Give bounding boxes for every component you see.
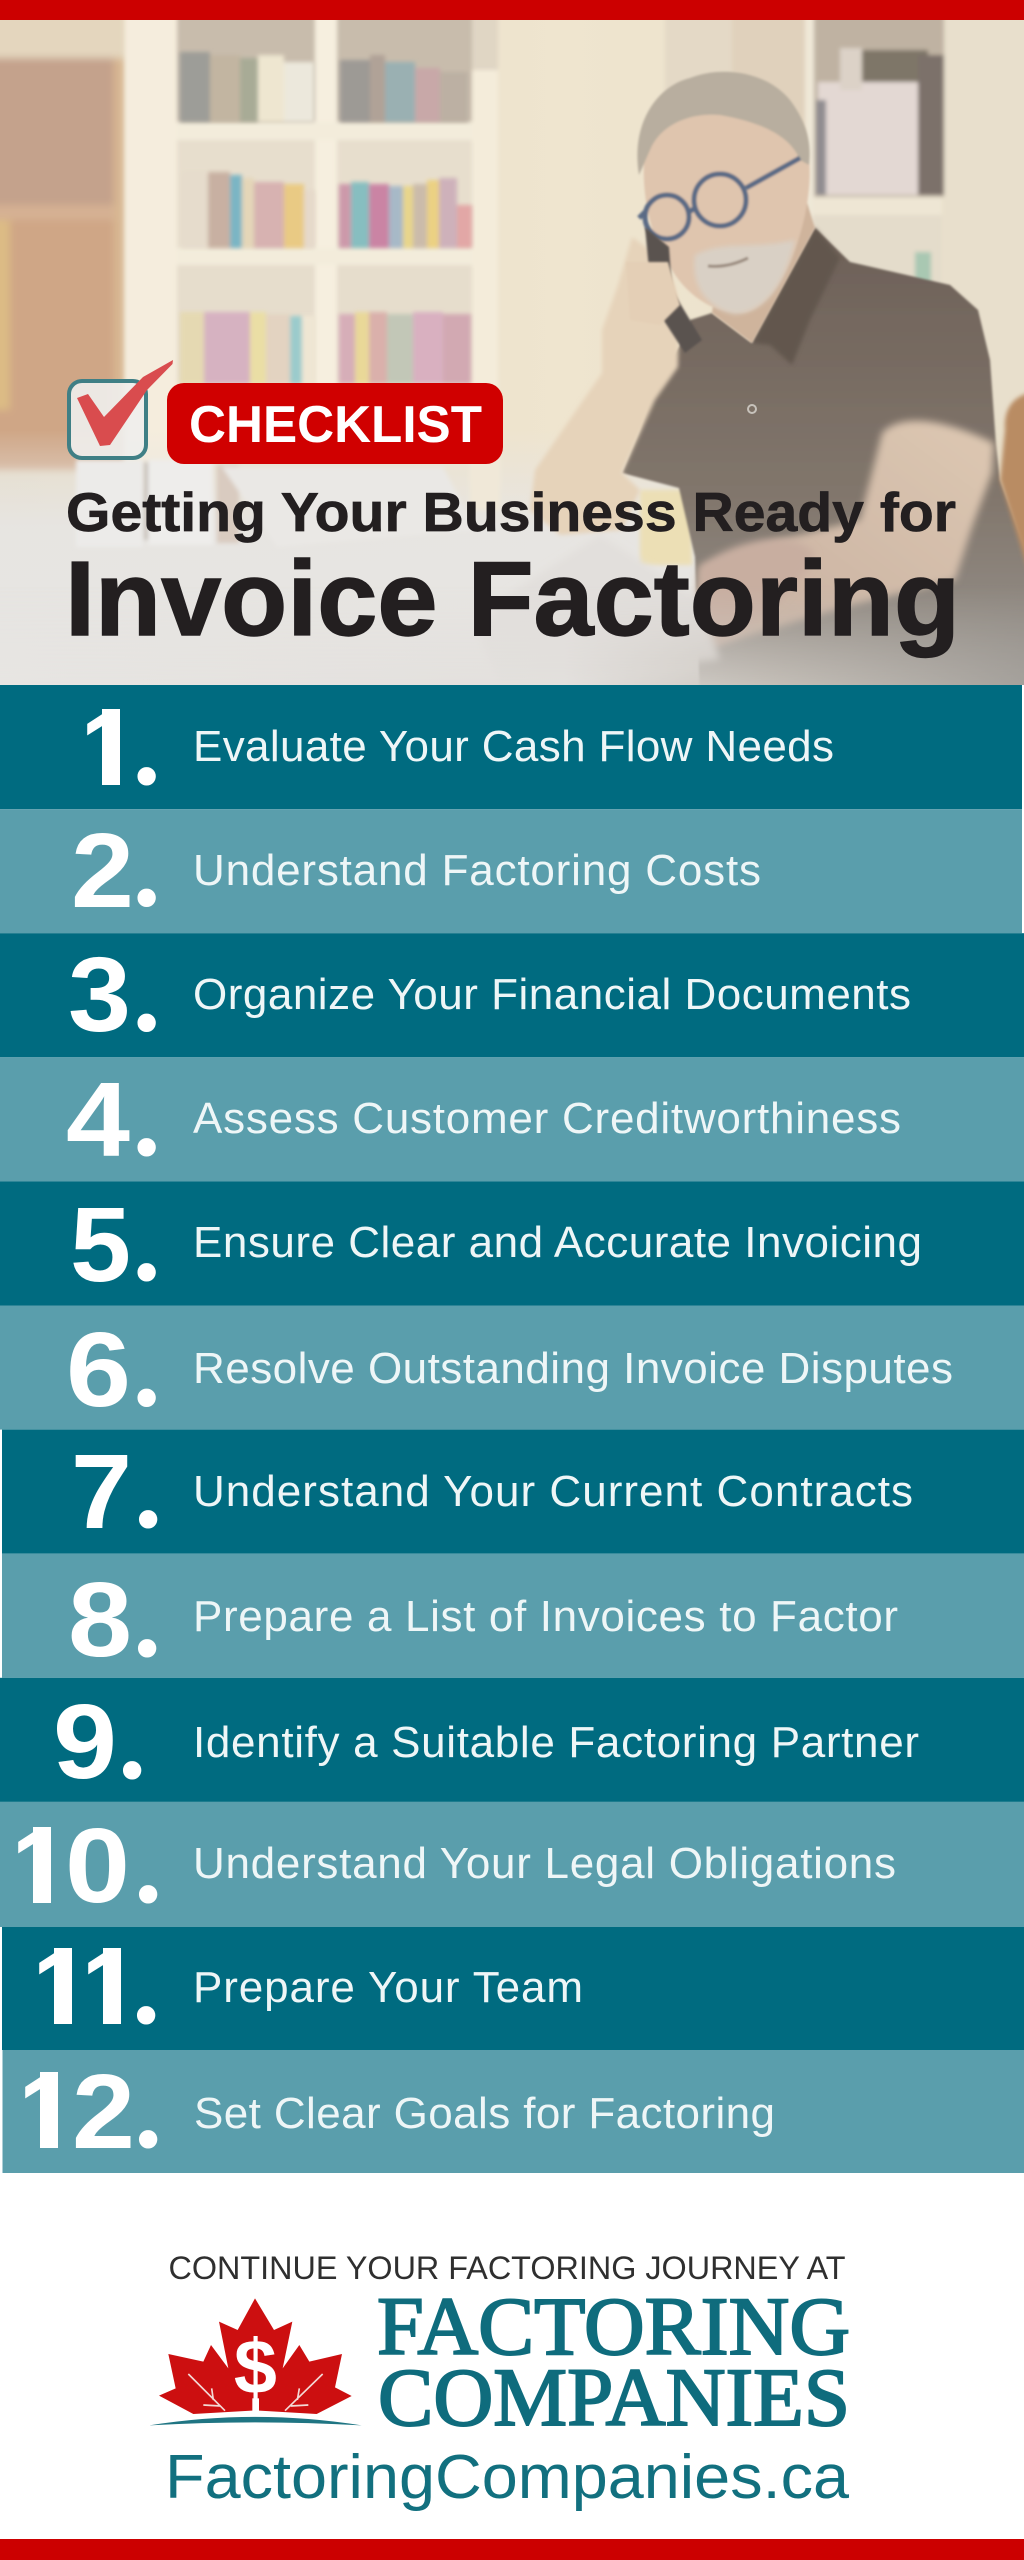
website url: FactoringCompanies.ca [165, 2443, 850, 2512]
row 4: 4 [66, 1061, 130, 1179]
logo wordmark: COMPANIES [378, 2351, 850, 2443]
row 11 [2, 1923, 1024, 2050]
row 7: Understand Your Current Contracts [193, 1467, 913, 1516]
call to action text: CONTINUE YOUR FACTORING JOURNEY AT [168, 2250, 846, 2286]
row 7: . [134, 1427, 162, 1552]
row 11: 1 [32, 1929, 91, 2047]
phone [645, 227, 702, 353]
row 9: . [118, 1678, 146, 1803]
door on the left [0, 0, 125, 470]
maple leaf [159, 2298, 352, 2414]
row 1: 1 [80, 690, 139, 808]
man's right arm reaching forward [690, 421, 994, 647]
logo wordmark: FACTORING [377, 2280, 850, 2372]
row 7: 7 [71, 1433, 132, 1551]
right-hand shelf [666, 20, 947, 282]
row 9: 9 [53, 1683, 117, 1801]
leaf veins [188, 2374, 323, 2411]
man's head [637, 72, 815, 343]
row 1: Evaluate Your Cash Flow Needs [193, 722, 834, 771]
row 2 [0, 806, 1022, 933]
row 8: . [133, 1556, 161, 1681]
top red bar [0, 0, 1024, 20]
row 2: Understand Factoring Costs [193, 846, 761, 895]
table foreground fade [583, 606, 1024, 685]
row 12: 1 [18, 2053, 77, 2171]
row 10: Understand Your Legal Obligations [193, 1839, 896, 1888]
fingers over the phone [647, 260, 681, 322]
row 3: Organize Your Financial Documents [193, 970, 911, 1019]
shirt button [748, 405, 756, 413]
bottom red bar [0, 2539, 1024, 2560]
row 12: Set Clear Goals for Factoring [194, 2089, 775, 2138]
row 11: . [132, 1923, 160, 2048]
row 8: Prepare a List of Invoices to Factor [193, 1592, 898, 1641]
left desk fade [0, 439, 696, 662]
blurred hand over papers [698, 535, 810, 577]
desk items and papers [74, 459, 694, 567]
row 5 [0, 1180, 1024, 1306]
row 5: . [132, 1180, 161, 1305]
row 10 [0, 1802, 1024, 1927]
hero photo: man on phone in front of bookshelves [0, 0, 1024, 700]
row 10: 0 [65, 1807, 130, 1925]
books: middle shelf [182, 172, 472, 248]
row 5: Ensure Clear and Accurate Invoicing [193, 1218, 922, 1267]
row 9 [0, 1678, 1024, 1803]
row 4 [0, 1055, 1024, 1181]
logo wordmark [377, 2280, 850, 2443]
man's shirt [622, 228, 1024, 700]
mouth [708, 258, 748, 266]
row 9: Identify a Suitable Factoring Partner [193, 1718, 919, 1767]
chair [1000, 392, 1024, 590]
dollar sign: $ [234, 2324, 277, 2410]
man's left arm and raised hand [530, 237, 679, 535]
row 2: . [132, 806, 161, 930]
row 1 [0, 684, 1022, 809]
beard [694, 240, 795, 314]
neck [711, 204, 816, 344]
row 12: 2 [72, 2053, 135, 2171]
checklist badge [167, 383, 503, 464]
row 1: . [132, 684, 161, 809]
row 3 [0, 930, 1024, 1057]
row 6: . [132, 1306, 161, 1430]
papers on table [640, 560, 720, 664]
row 8 [2, 1554, 1024, 1681]
face [644, 110, 810, 313]
books: top shelf [180, 52, 468, 122]
glasses [639, 158, 800, 239]
hair [637, 72, 810, 175]
row 7 [2, 1427, 1024, 1554]
row 4: Assess Customer Creditworthiness [193, 1094, 901, 1143]
collar shadow [752, 228, 840, 365]
row 6 [0, 1306, 1024, 1430]
row 6: Resolve Outstanding Invoice Disputes [193, 1344, 953, 1393]
checklist badge: CHECKLIST [189, 396, 482, 454]
panel: checklist rows [0, 684, 1024, 2173]
row 12 [2, 2047, 1024, 2173]
row 2: 2 [71, 812, 134, 930]
row 5: 5 [70, 1186, 131, 1304]
title: Invoice Factoring [65, 540, 960, 658]
row 11: 1 [81, 1929, 140, 2047]
title: Getting Your Business Ready for [66, 481, 956, 543]
row 10: . [134, 1802, 162, 1927]
row 4: . [132, 1055, 161, 1180]
title [65, 481, 960, 658]
books: lower shelf [180, 312, 471, 384]
row 8: 8 [68, 1561, 132, 1679]
row 3: 3 [68, 936, 131, 1054]
horizon swoosh [149, 2417, 362, 2425]
icon: red maple leaf logo with dollar sign [149, 2298, 362, 2425]
row 12: . [134, 2047, 162, 2172]
row 3: . [132, 930, 161, 1056]
row 10: 1 [11, 1808, 70, 1926]
row 11: Prepare Your Team [193, 1963, 583, 2012]
icon: checkbox with red check mark [69, 360, 173, 458]
bookcase [125, 0, 498, 490]
row 6: 6 [66, 1311, 131, 1429]
